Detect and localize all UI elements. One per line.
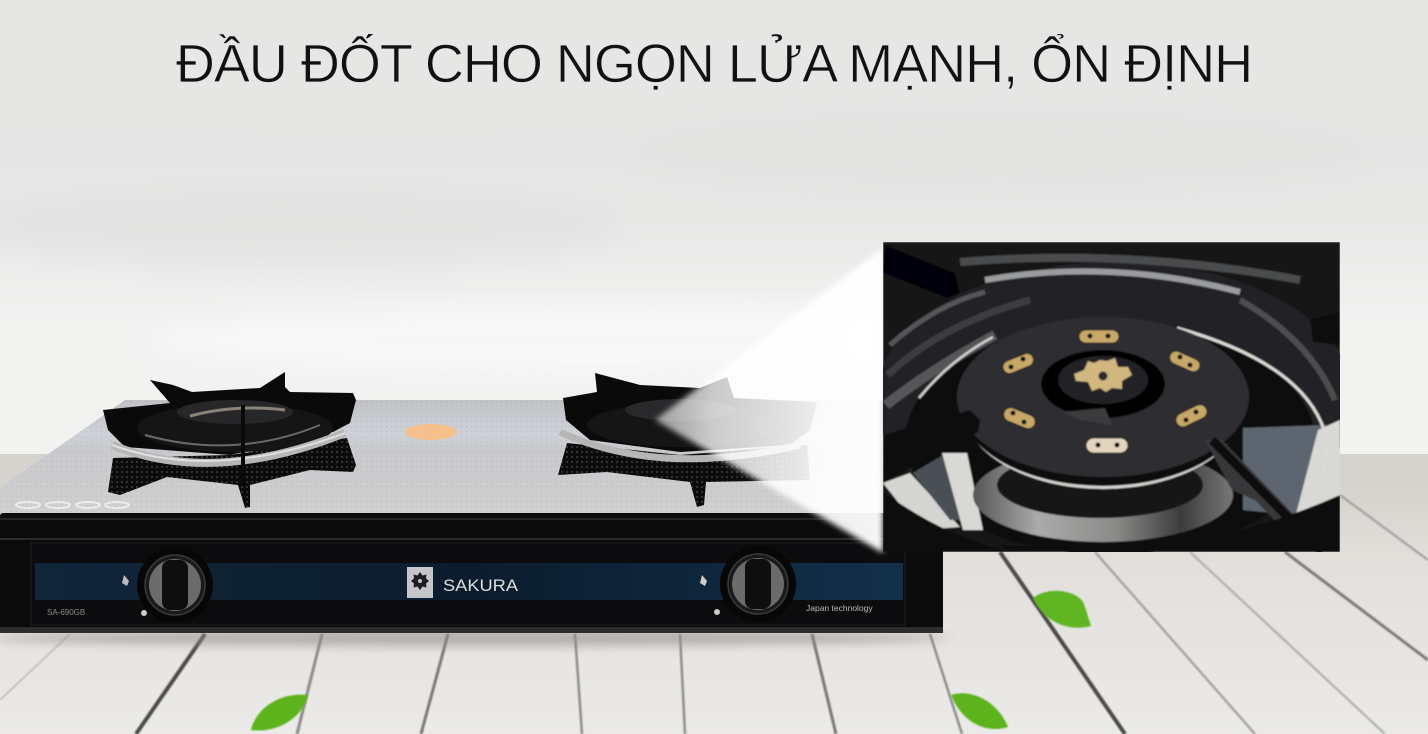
logo badge	[407, 567, 519, 598]
control strip	[31, 543, 905, 625]
right burner	[558, 373, 817, 507]
cup below cap	[972, 464, 1234, 544]
logo badge: SAKURA	[443, 576, 519, 595]
model label: SA-690GB	[47, 608, 85, 617]
leaf: floor bottom centre	[951, 693, 1008, 729]
glass touch marks	[16, 502, 129, 508]
detail inset: burner close-up	[875, 242, 1355, 555]
glass top	[0, 400, 945, 514]
wall background	[0, 0, 1428, 484]
panel body	[0, 513, 943, 632]
left burner	[103, 372, 356, 508]
technology label: Japan technology	[806, 603, 873, 613]
lower frame	[883, 492, 1013, 552]
left knob	[122, 547, 213, 623]
title: ĐẦU ĐỐT CHO NGỌN LỬA MẠNH, ỔN ĐỊNH	[176, 34, 1252, 94]
port holes	[1008, 334, 1198, 448]
outer ring	[883, 263, 1340, 473]
leaves	[251, 591, 1091, 731]
golden flower nozzle	[1074, 358, 1132, 392]
leaf: floor bottom left	[251, 695, 308, 731]
steel basin	[1243, 425, 1327, 515]
leaf: floor right	[1033, 591, 1091, 628]
burner cap	[957, 317, 1249, 489]
flame ports	[1001, 330, 1209, 453]
light beam to detail inset	[655, 248, 883, 553]
centre badge	[405, 424, 457, 440]
gas stove	[0, 372, 945, 633]
wooden floor	[0, 482, 1428, 734]
right knob	[700, 546, 796, 622]
pan supports	[883, 245, 960, 298]
